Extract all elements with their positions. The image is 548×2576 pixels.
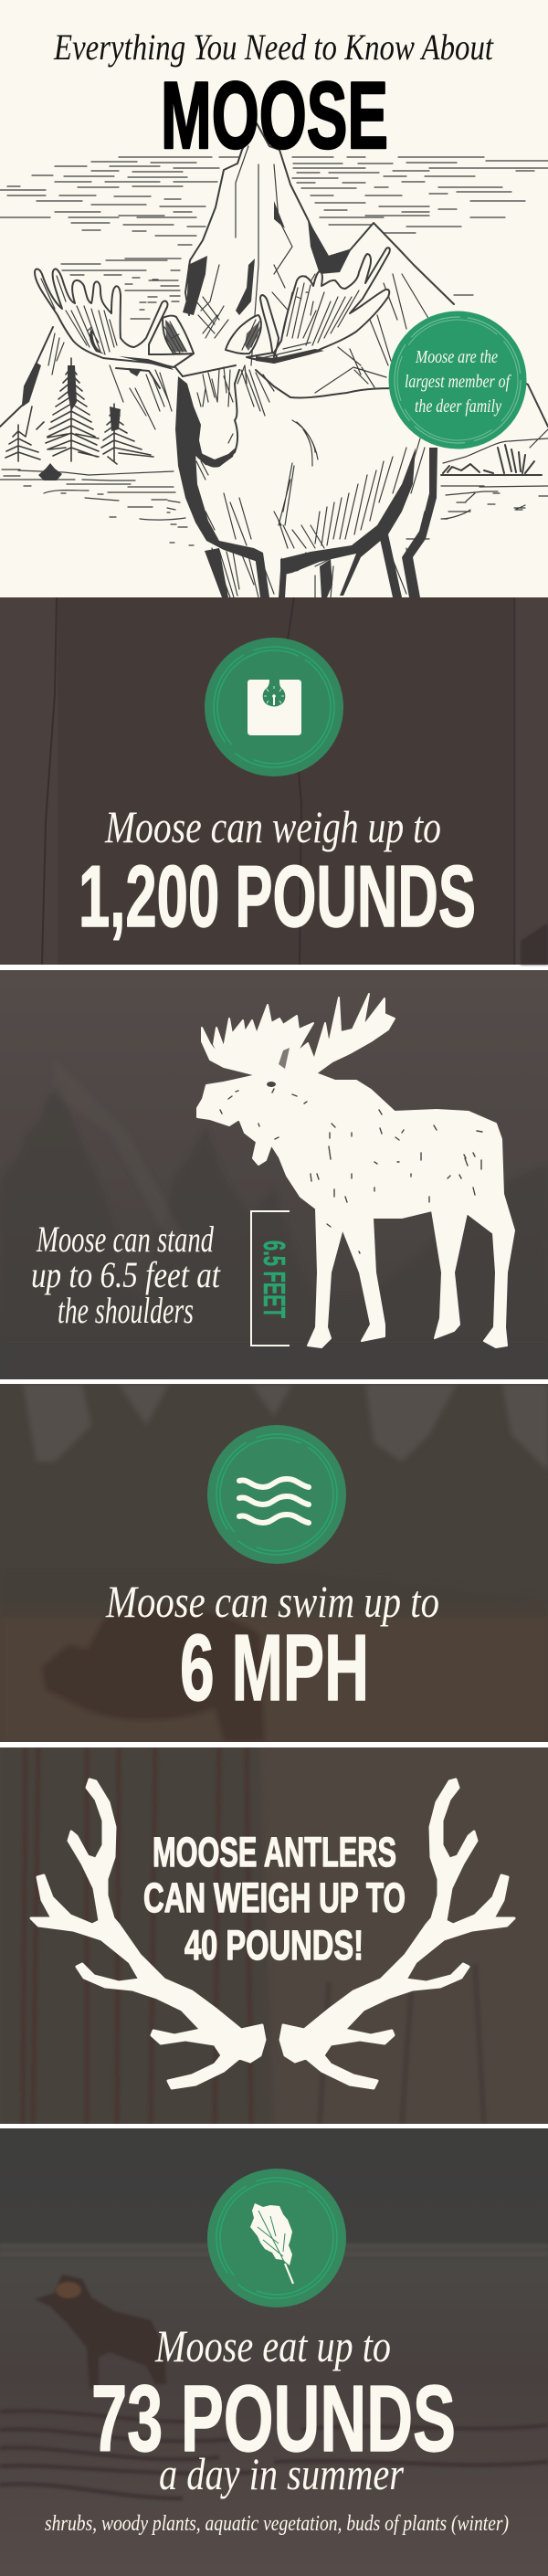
icon: antlers <box>31 1779 514 2088</box>
illustration: moose sketch <box>35 248 437 603</box>
text: moose can stand: up to 6.5 feet at <box>31 1254 221 1295</box>
callout: largest deer family: the deer family <box>415 396 501 417</box>
text: moose can weigh up to: Moose can weigh up to <box>104 801 441 852</box>
icon: moose silhouette <box>197 994 514 1347</box>
panel: food <box>0 2128 548 2576</box>
text: moose can stand: Moose can stand <box>36 1219 215 1260</box>
panel: height <box>0 970 548 1379</box>
illustration: ground lines <box>0 429 548 545</box>
panel: swim <box>0 1384 548 1749</box>
illustration: mountains <box>0 122 548 430</box>
icon: waves badge <box>207 1425 346 1564</box>
title: moose: MOOSE <box>161 63 388 169</box>
panel: header <box>0 0 548 603</box>
right antler <box>247 248 390 364</box>
callout: largest deer family <box>389 311 526 449</box>
panel: antlers <box>0 1747 548 2124</box>
moose body <box>115 366 389 561</box>
callout: largest deer family: Moose are the <box>415 347 498 367</box>
text: moose antlers can weigh up to 40 pounds: MOOSE ANTLERS <box>153 1829 396 1875</box>
text: moose antlers can weigh up to 40 pounds <box>144 1836 406 1960</box>
text: a day in summer: a day in summer <box>159 2448 404 2499</box>
callout: largest deer family: largest member of <box>405 372 511 392</box>
left antler <box>35 269 194 370</box>
text: moose can stand <box>33 1226 221 1323</box>
bracket: height marker <box>251 1211 290 1346</box>
label: 6.5 feet: 6.5 FEET <box>258 1240 291 1318</box>
text: moose can stand: the shoulders <box>58 1290 194 1331</box>
text: moose eat up to: Moose eat up to <box>154 2320 391 2371</box>
illustration: trees <box>5 358 153 480</box>
illustration: sky lines <box>0 157 548 319</box>
text: moose can swim up to: Moose can swim up to <box>105 1576 439 1627</box>
icon: scale badge <box>205 638 343 776</box>
moose fur and legs <box>205 420 437 597</box>
icon: leaf badge <box>207 2169 346 2307</box>
panel: weight <box>0 597 548 965</box>
head <box>183 365 274 480</box>
stat: 6 mph: 6 MPH <box>180 1615 369 1720</box>
text: moose antlers can weigh up to 40 pounds: CAN WEIGH UP TO <box>143 1874 406 1921</box>
ears <box>163 315 261 354</box>
text: moose antlers can weigh up to 40 pounds: 40 POUNDS! <box>184 1922 364 1969</box>
